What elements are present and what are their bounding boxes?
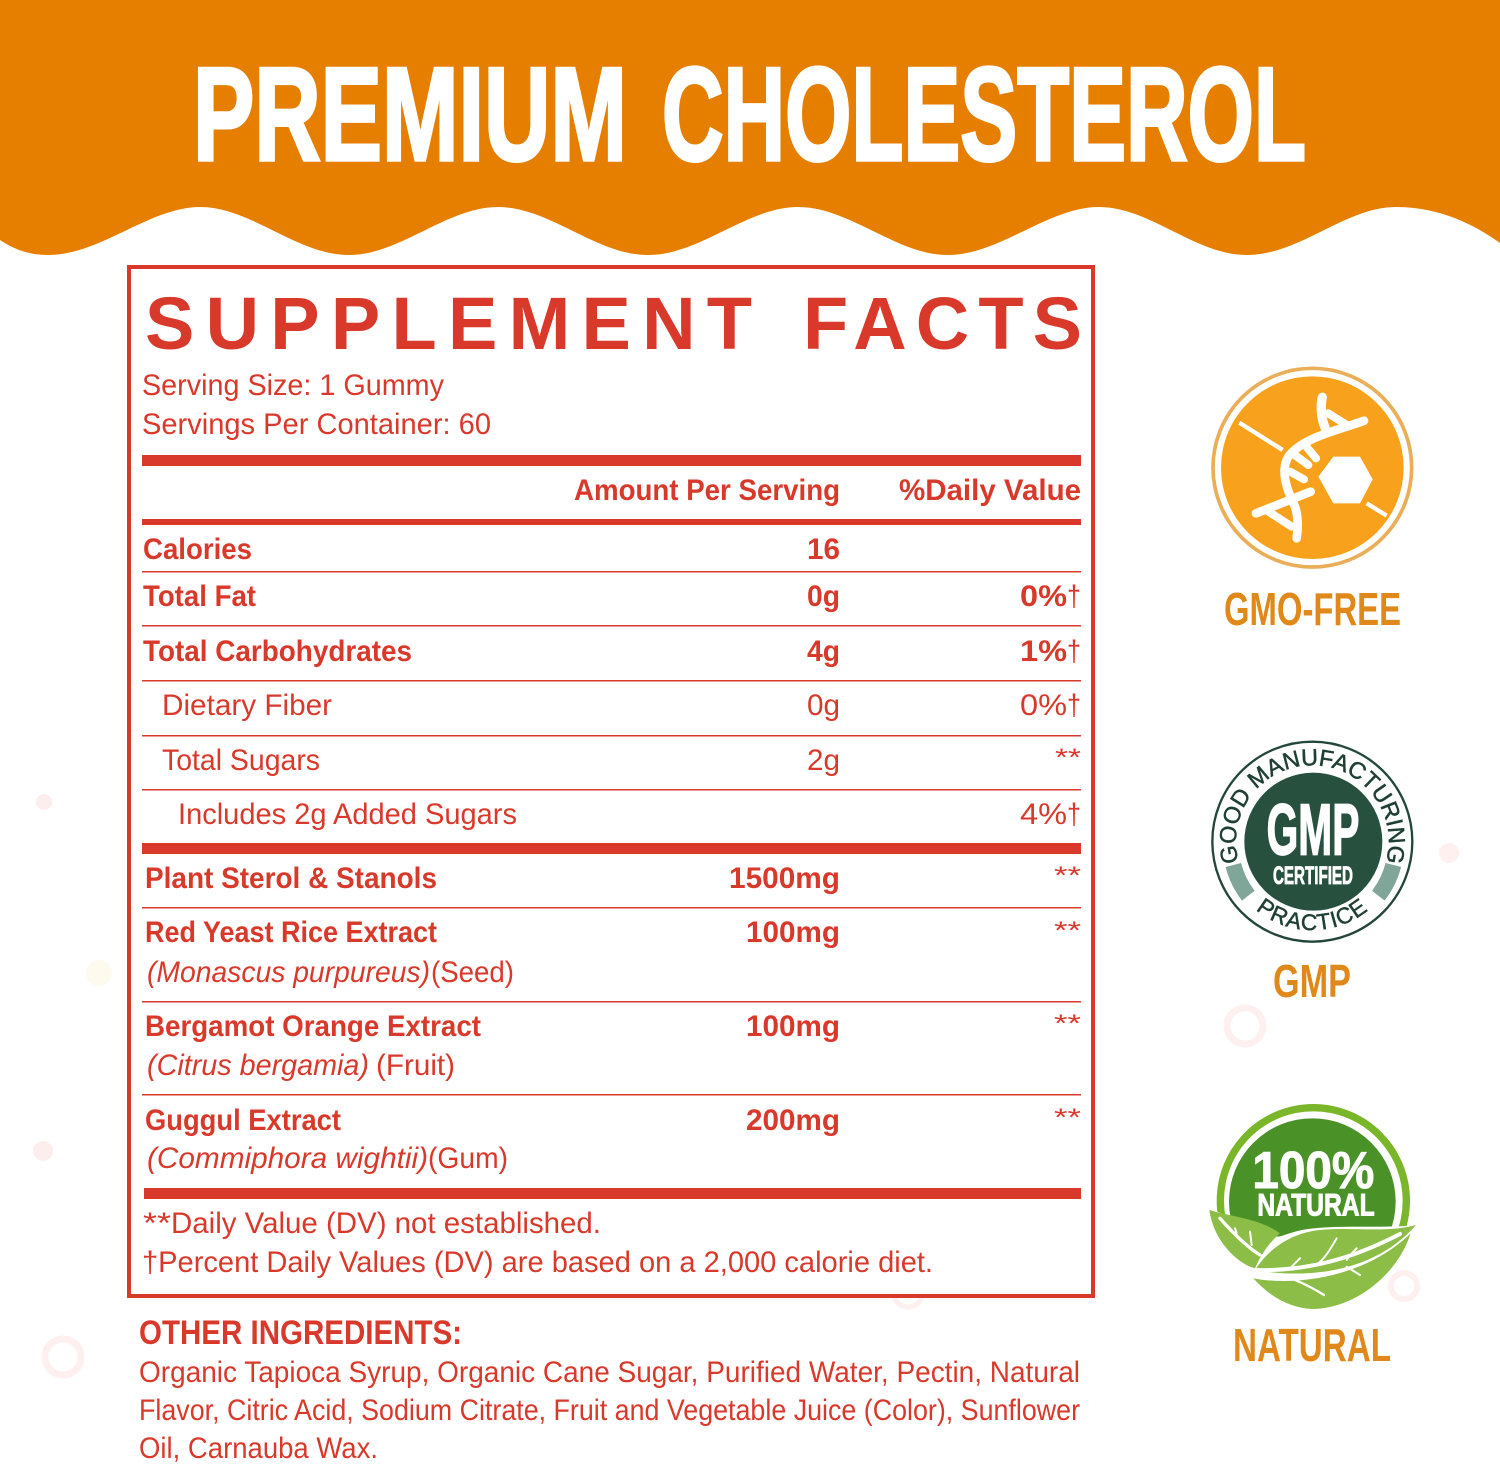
- row: total fat: Total Fat: [143, 580, 256, 613]
- row: added sugars: †: [1067, 798, 1081, 831]
- heading: supplement facts: SUPPLEMENT: [145, 282, 752, 365]
- row: total sugars: **: [1055, 744, 1081, 772]
- row: red yeast rice extract: (Monascus purpureus): [147, 956, 430, 989]
- row: guggul extract: 200mg: [746, 1104, 840, 1137]
- row: total fat: [143, 580, 1081, 613]
- row: red yeast rice extract: Red Yeast Rice Extract: [145, 916, 437, 949]
- row: total fat: †: [1067, 580, 1081, 613]
- row: calories: [143, 533, 840, 566]
- row: plant sterol and stanols: 1500mg: [729, 862, 840, 895]
- panel: supplement facts: [129, 267, 1093, 1296]
- row: red yeast rice extract: **: [1054, 917, 1081, 945]
- icon: GMP certified badge: GMP: [1267, 790, 1359, 870]
- label: GMO-FREE: GMO-FREE: [1224, 583, 1401, 635]
- other ingredients: Oil, Carnauba Wax.: [139, 1432, 378, 1465]
- row: plant sterol and stanols: **: [1054, 862, 1081, 890]
- row: total carbohydrates: 1%: [1020, 635, 1067, 668]
- row: dietary fiber: Dietary Fiber: [162, 689, 332, 722]
- row: red yeast rice extract: [145, 916, 1081, 989]
- row: dietary fiber: †: [1067, 689, 1081, 722]
- row: total sugars: 2g: [807, 744, 840, 777]
- heading: supplement facts: FACTS: [803, 282, 1082, 365]
- header banner: orange wave: [0, 0, 1500, 255]
- row: bergamot orange extract: **: [1054, 1010, 1081, 1038]
- table header row: Amount Per Serving: [574, 474, 840, 507]
- table header row: %Daily Value: [899, 474, 1081, 507]
- icon: 100% natural badge: NATURAL: [1257, 1187, 1375, 1222]
- table header row: [574, 474, 1081, 507]
- serving information: Servings Per Container: 60: [142, 408, 491, 441]
- row: total carbohydrates: †: [1067, 635, 1081, 668]
- row: dietary fiber: [162, 689, 1081, 722]
- footnotes: **: [143, 1207, 171, 1240]
- row: total carbohydrates: 4g: [807, 635, 840, 668]
- row: total carbohydrates: [143, 635, 1081, 668]
- other ingredients: Flavor, Citric Acid, Sodium Citrate, Fruit and Vegetable Juice (Color), Sunflower: [139, 1394, 1080, 1427]
- row: guggul extract: (Gum): [428, 1142, 508, 1175]
- row: added sugars: [178, 798, 1081, 831]
- row: guggul extract: [145, 1104, 1081, 1175]
- other ingredients: Organic Tapioca Syrup, Organic Cane Sugar, Purified Water, Pectin, Natural: [139, 1356, 1080, 1389]
- heading: supplement facts: [145, 282, 1082, 365]
- row: guggul extract: **: [1054, 1104, 1081, 1132]
- row: total sugars: Total Sugars: [162, 744, 320, 777]
- other ingredients: OTHER INGREDIENTS:: [139, 1314, 462, 1352]
- icon: GMP certified badge: [1211, 740, 1414, 943]
- row: bergamot orange extract: (Citrus bergamia): [147, 1049, 369, 1082]
- row: bergamot orange extract: [145, 1010, 1081, 1082]
- icon: GMP certified badge: CERTIFIED: [1273, 862, 1353, 890]
- row: dietary fiber: 0g: [807, 689, 840, 722]
- row: added sugars: Includes 2g Added Sugars: [178, 798, 517, 831]
- icon: GMP certified badge: PRACTICE: [1256, 898, 1368, 930]
- row: total carbohydrates: Total Carbohydrates: [143, 635, 412, 668]
- row: bergamot orange extract: Bergamot Orange Extract: [145, 1010, 481, 1043]
- row: red yeast rice extract: (Seed): [431, 956, 514, 989]
- icon: GMO-free badge: [1213, 368, 1412, 567]
- row: total fat: 0%: [1020, 580, 1067, 613]
- footnotes: †Percent Daily Values (DV) are based on a 2,000 calorie diet.: [142, 1246, 933, 1279]
- footnotes: Daily Value (DV) not established.: [171, 1207, 601, 1240]
- row: calories: 16: [807, 533, 840, 566]
- row: guggul extract: Guggul Extract: [145, 1104, 341, 1137]
- background decorative bubbles: [33, 794, 1459, 1375]
- title: [193, 41, 1306, 189]
- row: dietary fiber: 0%: [1020, 689, 1067, 722]
- row: bergamot orange extract: (Fruit): [376, 1049, 455, 1082]
- icon: GMP certified badge: GOOD MANUFACTURING: [1220, 748, 1406, 863]
- row: added sugars: 4%: [1020, 798, 1067, 831]
- row: red yeast rice extract: 100mg: [746, 916, 840, 949]
- row: total sugars: [162, 744, 1081, 777]
- serving information: [142, 369, 491, 441]
- row: bergamot orange extract: 100mg: [746, 1010, 840, 1043]
- other ingredients: [139, 1314, 1080, 1465]
- title: PREMIUM: [193, 41, 627, 189]
- row: plant sterol and stanols: [145, 862, 1081, 895]
- serving information: Serving Size: 1 Gummy: [142, 369, 444, 402]
- row: calories: Calories: [143, 533, 252, 566]
- row: plant sterol and stanols: Plant Sterol & Stanols: [145, 862, 437, 895]
- label: GMP: GMP: [1273, 955, 1351, 1007]
- footnotes: [142, 1207, 933, 1279]
- icon: 100% natural badge: [1209, 1104, 1416, 1309]
- row: total fat: 0g: [807, 580, 840, 613]
- row: guggul extract: (Commiphora wightii): [147, 1142, 428, 1175]
- label: NATURAL: NATURAL: [1233, 1319, 1391, 1371]
- icon: 100% natural badge: 100%: [1252, 1142, 1374, 1200]
